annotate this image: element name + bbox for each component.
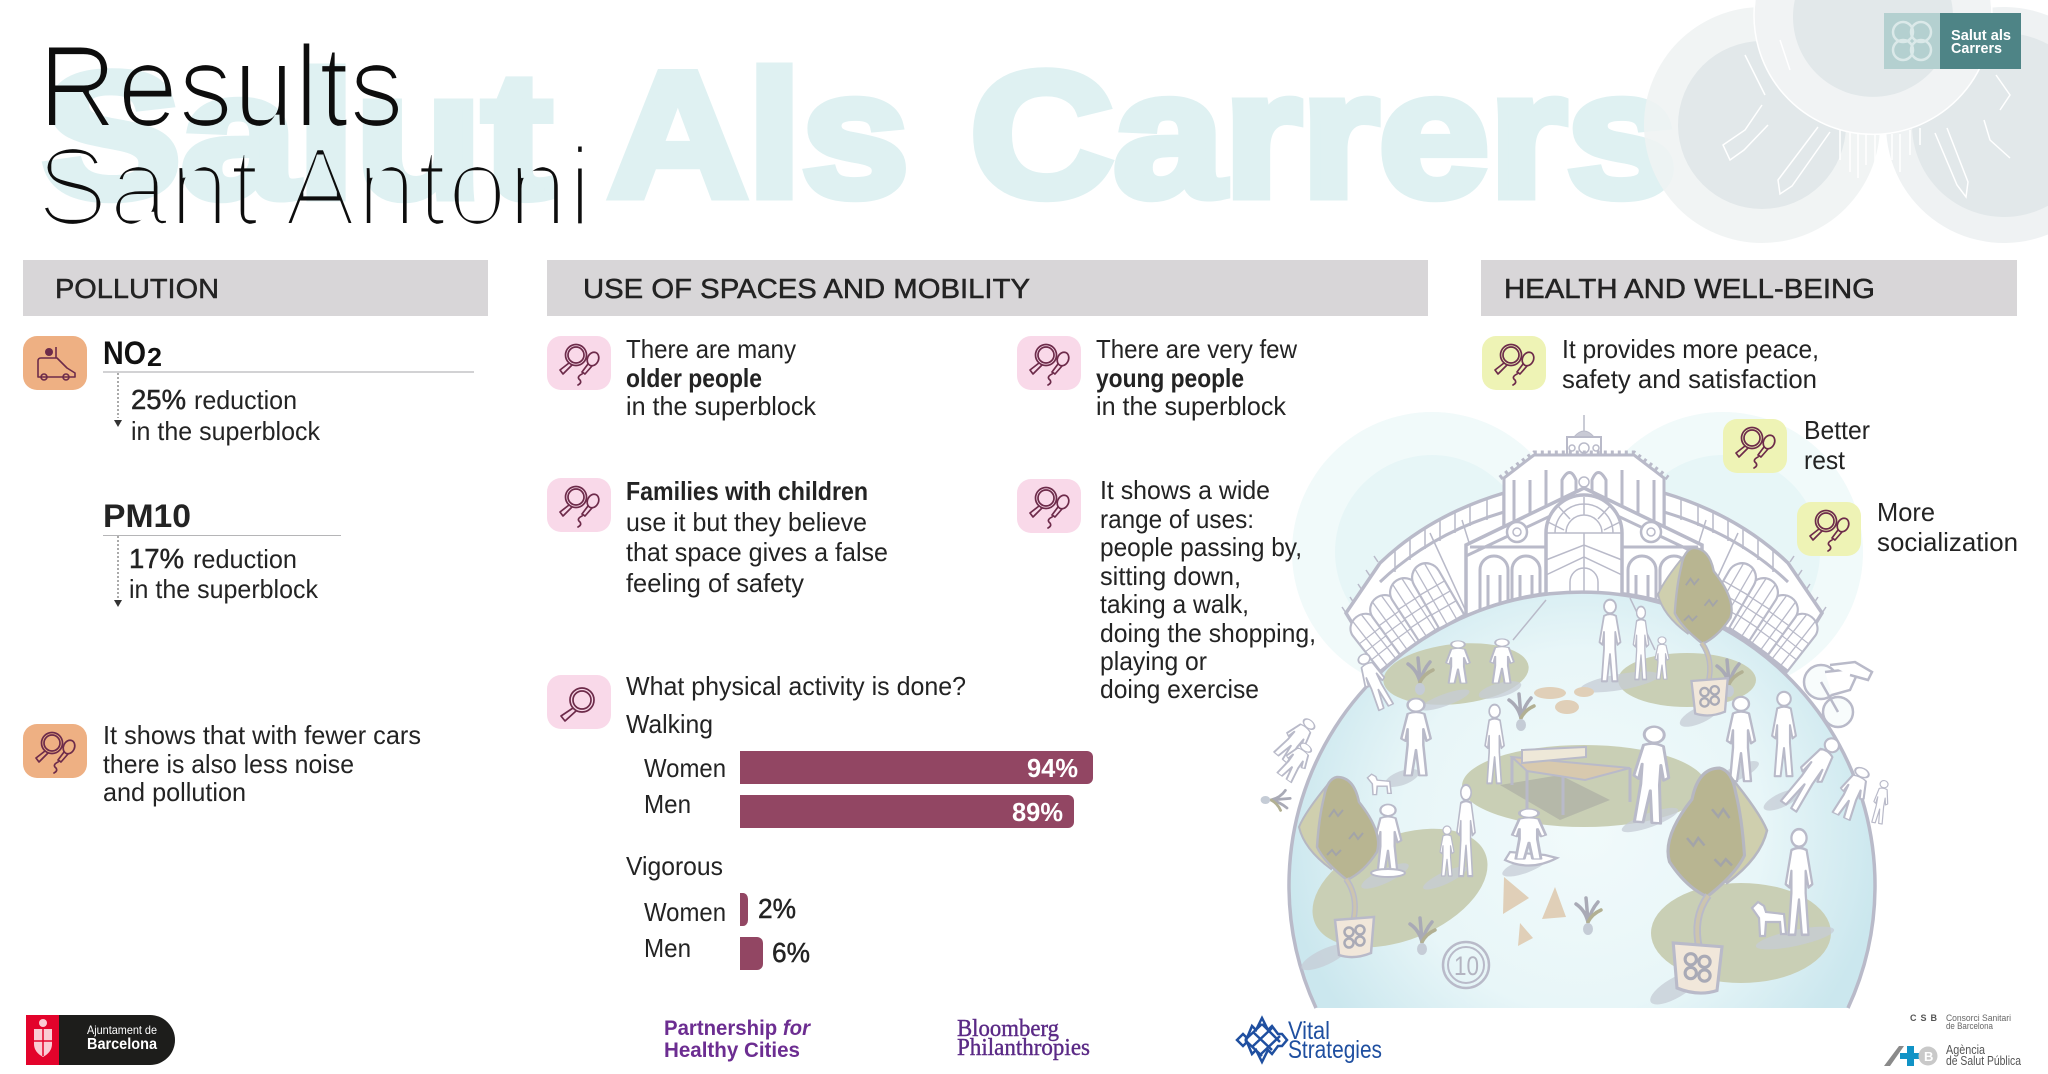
- finding: families with children: use it but they believe: [626, 507, 867, 537]
- noise note: It shows that with fewer cars: [103, 720, 421, 750]
- finding: better rest: Better: [1804, 415, 1870, 445]
- PM10 stat: 17%: [129, 543, 184, 574]
- finding: wide range of uses: sitting down,: [1100, 561, 1241, 591]
- bar chart: physical activity: Women: [644, 753, 726, 783]
- finding: peace and safety: safety and satisfaction: [1562, 364, 1817, 394]
- panel heading: health and well-being: [1481, 260, 2017, 316]
- panel heading: pollution: POLLUTION: [55, 273, 219, 304]
- logo: Ajuntament de Barcelona: [26, 1015, 175, 1065]
- NO2 stat: reduction: [194, 385, 297, 415]
- watermark: Salut Als Carrers: Carrers: [970, 35, 1677, 234]
- logo: Bloomberg Philanthropies: Bloomberg: [957, 1016, 1059, 1042]
- decorative flower with city drawing, top right: [1644, 0, 2048, 243]
- logo: Vital Strategies: Vital: [1288, 1017, 1330, 1045]
- title line: Sant Antoni: Sant Antoni: [36, 125, 592, 249]
- logo: Consorci Sanitari de Barcelona: [1910, 1013, 2011, 1031]
- bar chart: physical activity: Men: [644, 789, 691, 819]
- cyclist: [1804, 662, 1872, 727]
- logo: Agència de Salut Pública: [1884, 1042, 2022, 1068]
- PM10 stat: in the superblock: [129, 574, 319, 604]
- globe of the square: [1289, 592, 1875, 1008]
- bar chart: physical activity: 94%: [1027, 753, 1078, 783]
- finding: families with children: Families with children: [626, 476, 868, 506]
- finding: young people: [1017, 334, 1297, 421]
- logo: Agència de Salut Pública: de Salut Pública: [1946, 1053, 2022, 1068]
- watermark: Salut Als Carrers: Als: [608, 35, 909, 234]
- bar chart: physical activity: [547, 671, 1093, 970]
- panel heading: pollution: [23, 260, 488, 316]
- icon: car: [23, 336, 87, 390]
- logo: Bloomberg Philanthropies: Philanthropies: [957, 1035, 1090, 1061]
- shadows: [1298, 667, 1836, 1011]
- bar chart: physical activity: 89%: [1012, 797, 1063, 827]
- noise note: and pollution: [103, 777, 246, 807]
- noise note: [23, 720, 421, 807]
- finding: wide range of uses: doing exercise: [1100, 674, 1259, 704]
- plants: [1261, 658, 1742, 955]
- finding: older people: older people: [626, 363, 762, 393]
- watermark: Salut Als Carrers: [42, 35, 1677, 235]
- logo: Consorci Sanitari de Barcelona: Consorci Sanitari: [1946, 1013, 2011, 1023]
- PM10 stat: [103, 498, 341, 607]
- bar chart: physical activity: Women: [644, 897, 726, 927]
- NO2 stat: 25%: [131, 384, 186, 415]
- finding: wide range of uses: [1017, 475, 1316, 704]
- logo: Salut als Carrers: Carrers: [1951, 40, 2002, 57]
- logo: Ajuntament de Barcelona: Barcelona: [87, 1036, 157, 1053]
- logo: Vital Strategies: Strategies: [1288, 1036, 1382, 1064]
- NO2 stat: in the superblock: [131, 416, 321, 446]
- bar chart: physical activity: Walking: [626, 709, 713, 739]
- trees: [1299, 548, 1767, 993]
- logo: Partnership for Healthy Cities: Healthy Cities: [664, 1039, 800, 1062]
- finding: more socialization: socialization: [1877, 527, 2018, 557]
- noise note: there is also less noise: [103, 749, 354, 779]
- finding: wide range of uses: doing the shopping,: [1100, 618, 1316, 648]
- background petals: [1292, 412, 1863, 692]
- finding: better rest: rest: [1804, 445, 1846, 475]
- finding: wide range of uses: range of uses:: [1100, 504, 1254, 534]
- logo: Salut als Carrers: Salut als: [1951, 27, 2011, 44]
- bar chart: physical activity: Men: [644, 933, 691, 963]
- finding: young people: in the superblock: [1096, 391, 1287, 421]
- finding: peace and safety: [1482, 334, 1819, 394]
- panel: pollution: [23, 335, 474, 807]
- logo: Consorci Sanitari de Barcelona: CSB: [1910, 1013, 1938, 1023]
- finding: peace and safety: It provides more peace,: [1562, 334, 1819, 364]
- panel: use of spaces and mobility: [547, 334, 1316, 970]
- finding: more socialization: More: [1877, 497, 1935, 527]
- logo: Salut als Carrers: [1884, 13, 2021, 69]
- bar chart: physical activity: 2%: [758, 893, 796, 924]
- title: [36, 23, 592, 249]
- logo: Partnership for Healthy Cities: Partnership for: [664, 1017, 812, 1040]
- logo: Ajuntament de Barcelona: Ajuntament de: [87, 1023, 157, 1037]
- logo: Consorci Sanitari de Barcelona: de Barcelona: [1946, 1021, 1993, 1031]
- finding: families with children: feeling of safety: [626, 568, 804, 598]
- PM10 stat: PM10: [103, 498, 191, 534]
- logo: Partnership for Healthy Cities: [664, 1017, 812, 1062]
- finding: wide range of uses: It shows a wide: [1100, 475, 1270, 505]
- sign: speed limit 10: 10: [1454, 951, 1479, 981]
- watermark: Salut Als Carrers: Salut: [42, 36, 552, 235]
- market building: [1342, 415, 1826, 672]
- panel: health and well-being: [1482, 334, 2018, 557]
- footer logos: [26, 1013, 2022, 1068]
- logo: Agència de Salut Pública: Agència: [1946, 1042, 1986, 1057]
- title line: Results: Results: [38, 23, 404, 151]
- PM10 stat: reduction: [193, 544, 297, 574]
- panel heading: health and well-being: HEALTH AND WELL-BEING: [1504, 273, 1875, 304]
- NO2 stat: [103, 335, 474, 446]
- panel heading: use of spaces and mobility: USE OF SPACES AND MOBILITY: [583, 273, 1030, 304]
- sign: speed limit 10: [1443, 942, 1489, 988]
- finding: families with children: that space gives a false: [626, 537, 888, 567]
- finding: older people: There are many: [626, 334, 796, 364]
- finding: older people: [547, 334, 817, 421]
- panel heading: use of spaces and mobility: [547, 260, 1428, 316]
- finding: families with children: [547, 476, 888, 598]
- finding: wide range of uses: playing or: [1100, 646, 1207, 676]
- logo: Vital Strategies: [1237, 1017, 1382, 1064]
- people: [1272, 600, 1892, 936]
- NO2 stat: 2: [147, 342, 162, 372]
- ping pong table: [1512, 747, 1630, 815]
- finding: young people: There are very few: [1096, 334, 1297, 364]
- finding: more socialization: [1797, 497, 2018, 557]
- stepping stones and cones: [1503, 687, 1594, 946]
- finding: wide range of uses: people passing by,: [1100, 532, 1302, 562]
- bar chart: physical activity: 6%: [772, 937, 810, 968]
- finding: better rest: [1723, 415, 1870, 475]
- bar chart: physical activity: Vigorous: [626, 851, 723, 881]
- illustration: Sant Antoni market and square: [1261, 412, 1892, 1011]
- finding: older people: in the superblock: [626, 391, 817, 421]
- NO2 stat: NO: [103, 335, 146, 371]
- finding: wide range of uses: taking a walk,: [1100, 589, 1249, 619]
- logo: Agència de Salut Pública: B: [1924, 1049, 1933, 1064]
- finding: young people: young people: [1096, 363, 1244, 393]
- bar chart: physical activity: What physical activity is done?: [626, 671, 966, 701]
- logo: Bloomberg Philanthropies: [957, 1016, 1090, 1061]
- green areas: [1295, 637, 1831, 983]
